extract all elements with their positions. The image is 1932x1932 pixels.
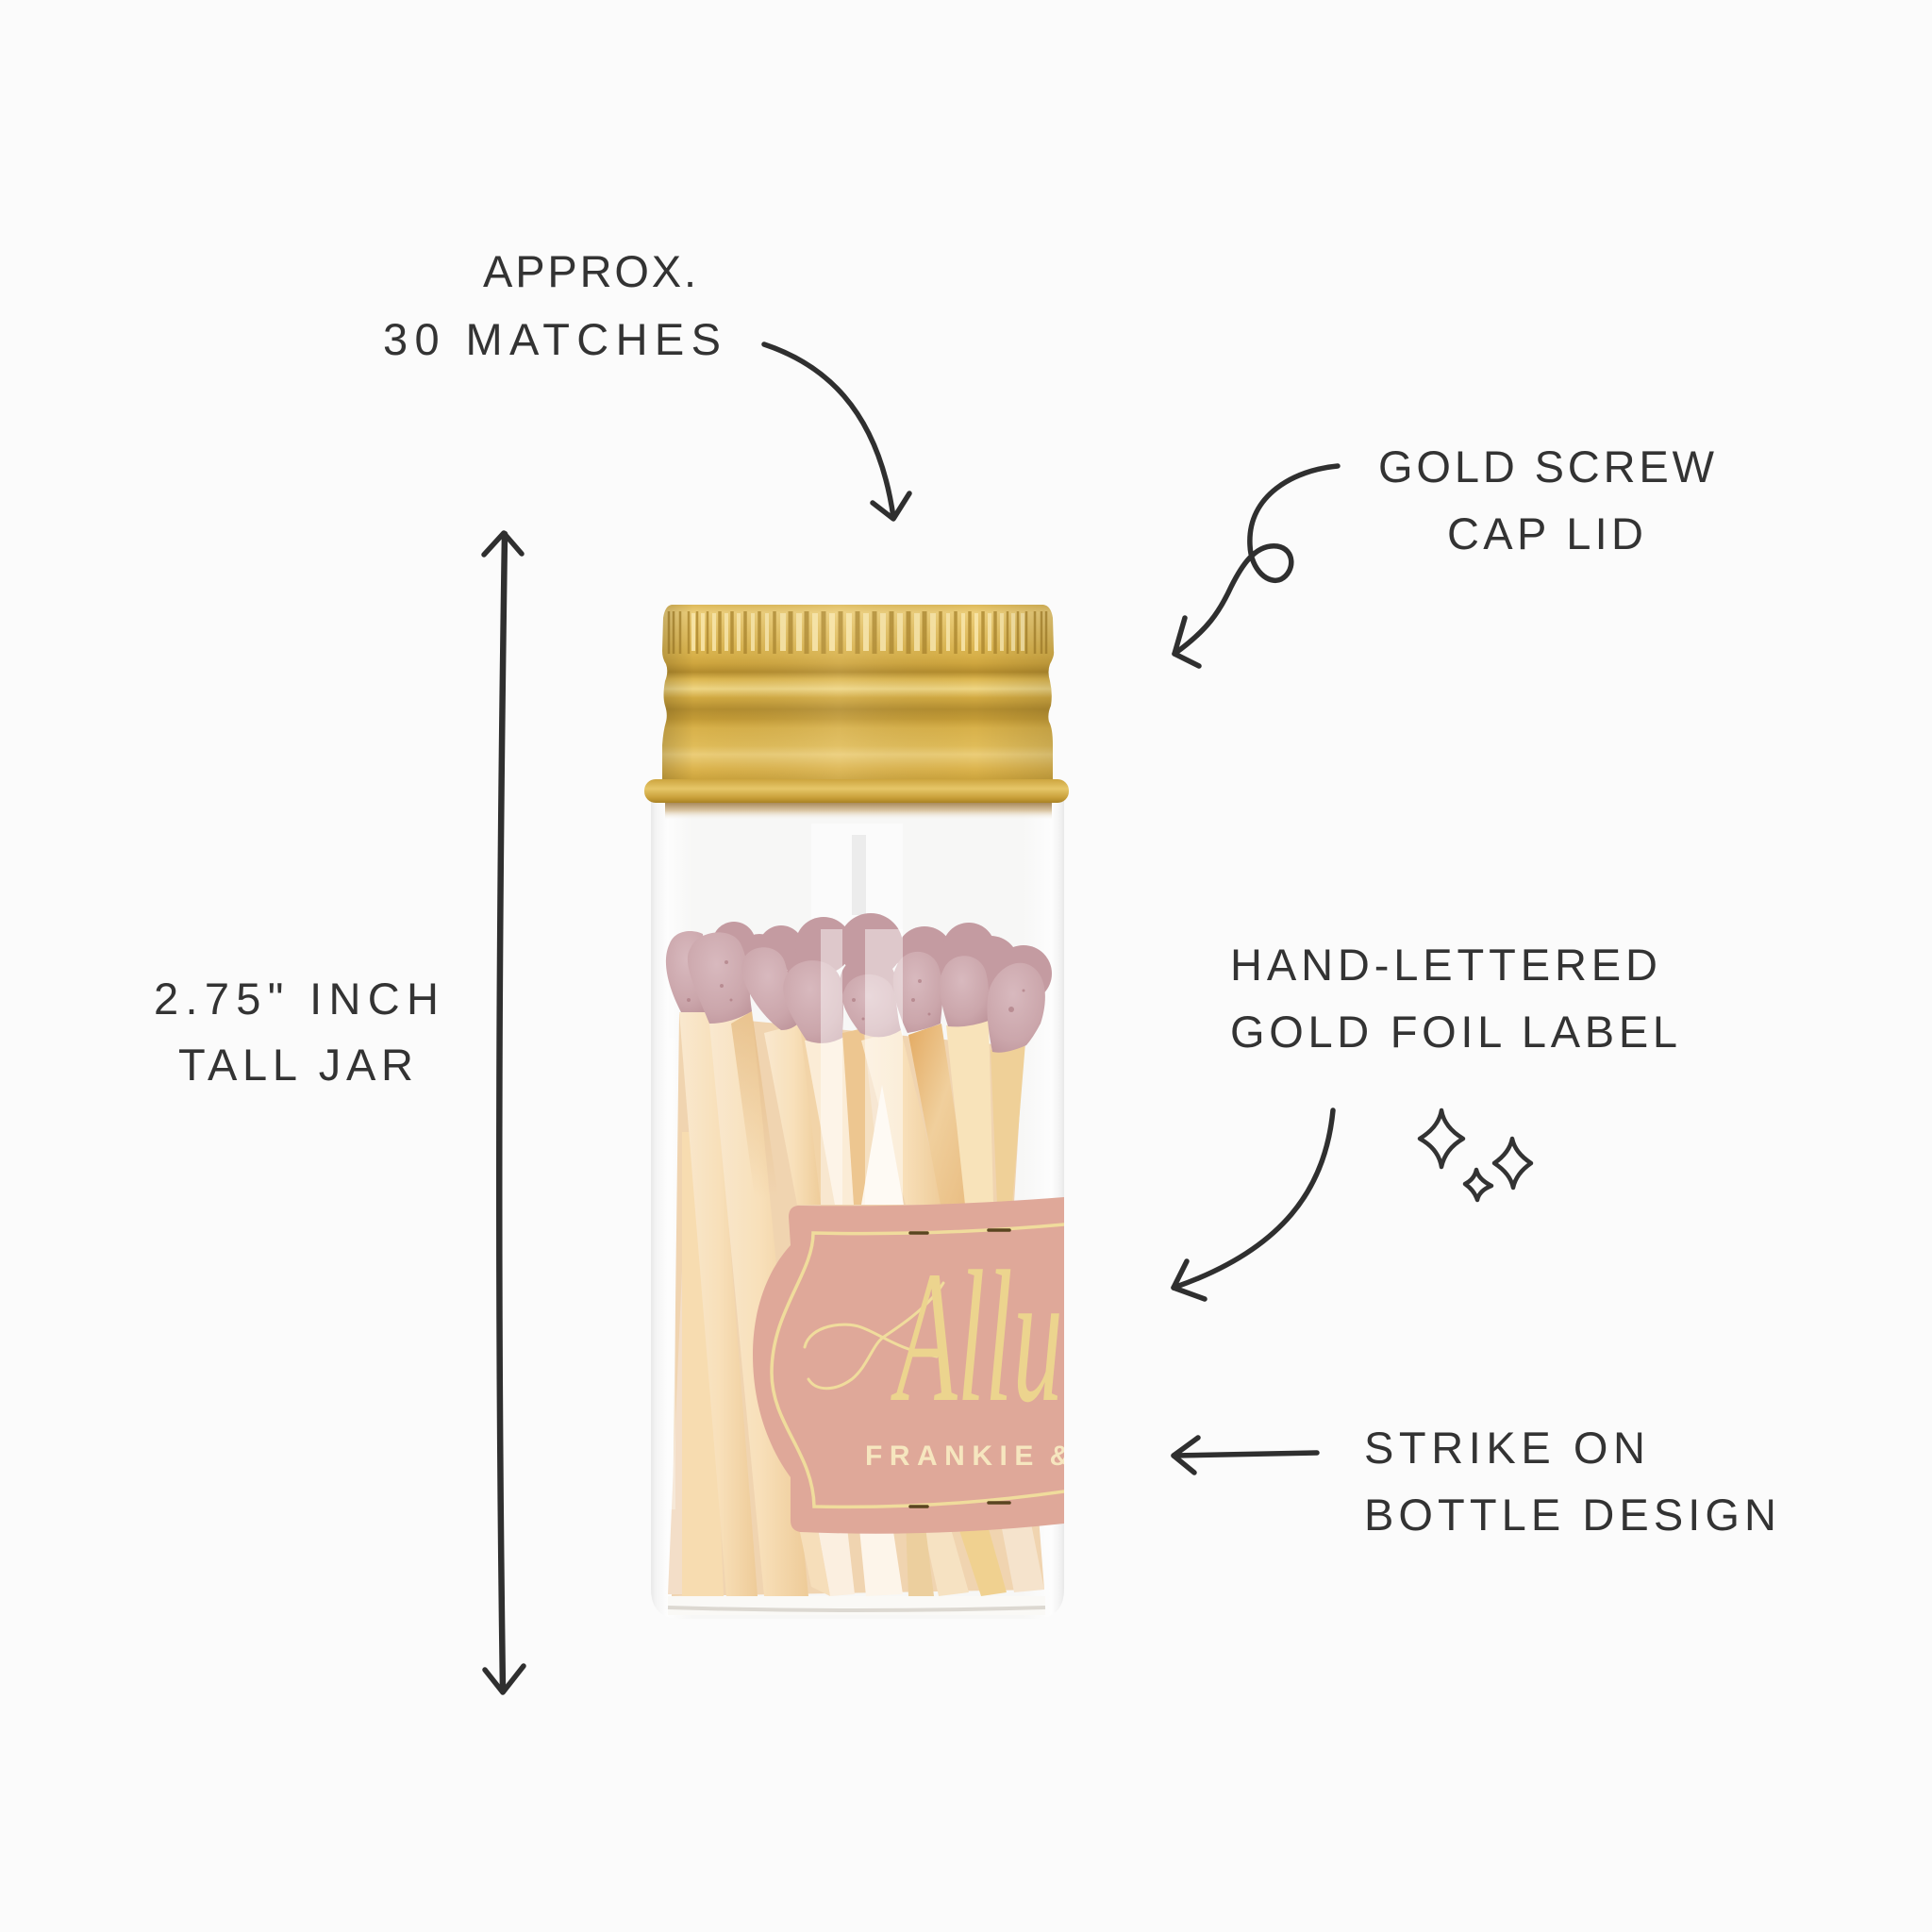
callout: approx 30 matches xyxy=(383,246,909,519)
script swash xyxy=(805,1283,943,1389)
text: gold screw cap lid: GOLD SCREW xyxy=(1378,441,1715,491)
text: strike on bottle design xyxy=(1364,1423,1776,1540)
callout: gold screw cap lid xyxy=(1174,441,1715,666)
text: approx 30 matches: 30 MATCHES xyxy=(383,314,721,364)
icon: sparkles xyxy=(1420,1110,1531,1200)
pink foil label xyxy=(753,1197,1064,1534)
text: approx 30 matches: APPROX. xyxy=(483,246,696,296)
arrow: double-headed height xyxy=(484,533,524,1692)
brand text: FRANKIE & CLAUDE xyxy=(865,1441,1247,1472)
matches xyxy=(666,913,1052,1596)
text: approx 30 matches xyxy=(383,246,721,364)
gold foil border xyxy=(772,1224,1064,1507)
knurled ridges xyxy=(669,611,1046,654)
text: 2.75 inch tall jar: TALL JAR xyxy=(178,1040,413,1090)
arrow: looped to cap xyxy=(1174,466,1338,666)
callout: strike on bottle design xyxy=(1174,1423,1776,1540)
text: 2.75 inch tall jar: 2.75" INCH xyxy=(154,974,439,1024)
jar base xyxy=(668,1596,1045,1615)
cap body xyxy=(662,605,1054,781)
back match heads xyxy=(712,913,1052,1011)
text: hand-lettered gold foil label: HAND-LETTERED xyxy=(1230,940,1657,990)
cap flange xyxy=(644,779,1069,803)
glass reflection bands xyxy=(668,929,903,1509)
callout: hand-lettered gold foil label xyxy=(1174,940,1677,1299)
text: strike on bottle design: BOTTLE DESIGN xyxy=(1364,1490,1776,1540)
wooden sticks xyxy=(668,1011,1044,1596)
speckles on heads xyxy=(687,960,1024,1021)
text: hand-lettered gold foil label: GOLD FOIL LABEL xyxy=(1230,1007,1677,1057)
gold screw cap xyxy=(644,605,1069,803)
text: gold screw cap lid xyxy=(1378,441,1715,558)
arrow: to matches xyxy=(764,344,909,519)
text: strike on bottle design: STRIKE ON xyxy=(1364,1423,1645,1473)
arrow: to label xyxy=(1174,1110,1333,1299)
script text: Allumer xyxy=(891,1231,1219,1441)
infographic canvas xyxy=(156,256,1774,1695)
text: hand-lettered gold foil label xyxy=(1230,940,1677,1057)
cap shading xyxy=(662,605,1054,781)
callout: jar height xyxy=(154,533,524,1692)
text: 2.75 inch tall jar xyxy=(154,974,439,1090)
jar illustration xyxy=(644,605,1069,1612)
glass jar body xyxy=(651,800,1064,1619)
front match heads xyxy=(666,931,1045,1053)
label shape xyxy=(753,1197,1064,1534)
text: gold screw cap lid: CAP LID xyxy=(1447,508,1643,558)
arrow: to bottle xyxy=(1174,1438,1317,1473)
